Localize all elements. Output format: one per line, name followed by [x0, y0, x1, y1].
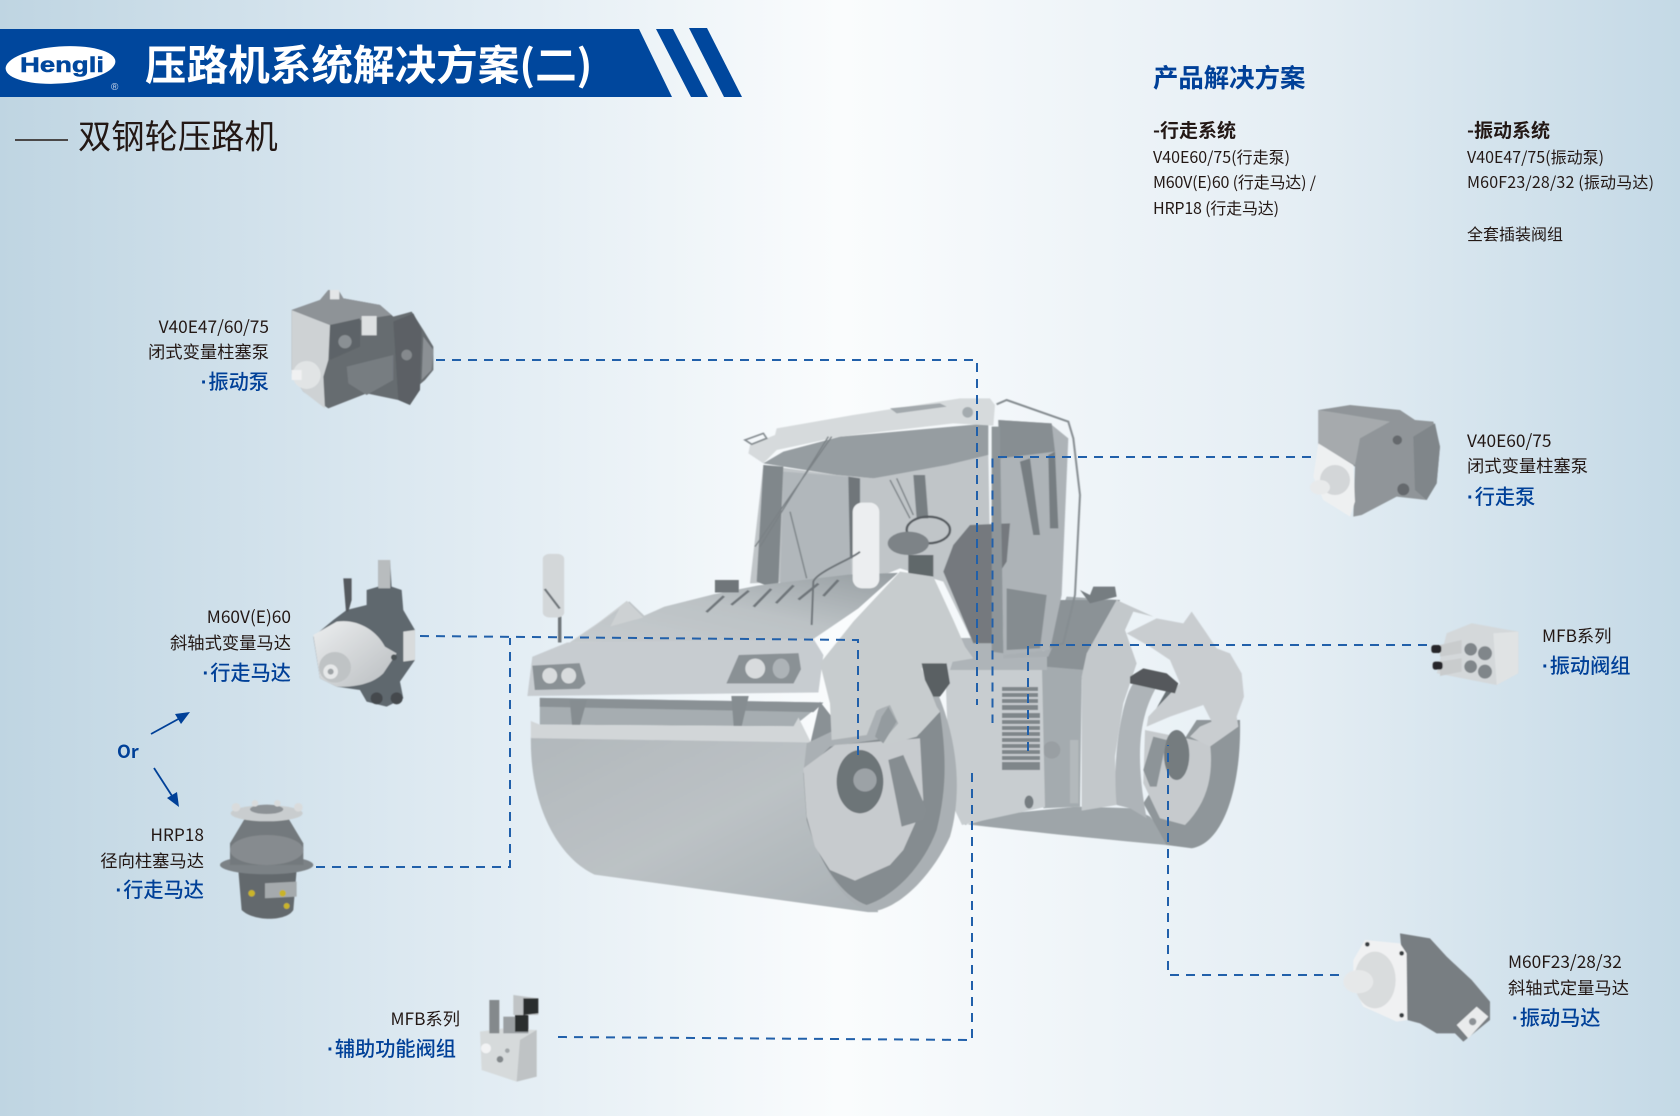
label: V40E60/75 travel pump: 闭式变量柱塞泵 [1467, 452, 1588, 477]
front drum shell [531, 737, 878, 912]
icon: M60F vibration motor [1343, 933, 1490, 1042]
label: HRP18 radial piston motor: ·行走马达 [116, 874, 204, 903]
vibration system list: -振动系统 [1467, 116, 1550, 143]
icon: HRP18 radial piston motor [220, 800, 313, 919]
rear body shadow [1040, 597, 1120, 808]
cab roof underside [763, 423, 988, 478]
label: V40E47 vibration pump: ·振动泵 [201, 366, 269, 395]
label: M60F vibration motor: 斜轴式定量马达 [1508, 974, 1629, 999]
vent grille [1002, 687, 1040, 770]
cab roof [748, 398, 995, 463]
label: HRP18 radial piston motor: HRP18 [150, 821, 204, 846]
icon: MFB auxiliary valve block [480, 995, 538, 1082]
drum wedge [803, 702, 832, 773]
label: M60V(E)60 travel motor: ·行走马达 [202, 657, 291, 686]
or choice [117, 712, 190, 807]
rear undercarriage [965, 807, 1167, 845]
banner stripe two [689, 28, 742, 97]
hydraulic hose [922, 663, 950, 697]
label: HRP18 radial piston motor: 径向柱塞马达 [100, 847, 204, 872]
label: MFB auxiliary valve: MFB系列 [390, 1005, 460, 1030]
leader: travel pump [992, 457, 1311, 723]
vibration system list: V40E47/75(振动泵) [1467, 144, 1604, 168]
left mirror [556, 616, 563, 642]
rear drum disc [1143, 730, 1211, 825]
drum disc [803, 738, 923, 881]
logo: ® [111, 82, 119, 93]
label: MFB vibration valve [1542, 622, 1630, 679]
icon: V40E47 vibration pump [292, 290, 433, 408]
vibration system list: 全套插装阀组 [1467, 221, 1563, 245]
arrow down [154, 768, 179, 807]
driver seat [943, 523, 1010, 643]
door pillar [992, 427, 1003, 653]
rear fender [1082, 600, 1153, 811]
label: V40E60/75 travel pump: ·行走泵 [1467, 481, 1535, 510]
label: V40E47 vibration pump: V40E47/60/75 [159, 313, 269, 338]
label: MFB vibration valve: MFB系列 [1542, 622, 1612, 647]
travel system list: -行走系统 [1153, 116, 1236, 143]
road roller illustration [527, 398, 1244, 912]
banner bar [0, 29, 672, 97]
panel: product solutions [1153, 59, 1654, 245]
heading: 产品解决方案 [1153, 59, 1305, 95]
travel system list: HRP18 (行走马达) [1153, 195, 1279, 219]
drum hub [837, 750, 883, 813]
or label: Or [117, 738, 139, 764]
front hood band [527, 639, 823, 696]
leader: HRP18 travel motor [316, 638, 510, 867]
wipers [755, 437, 913, 578]
label: M60F vibration motor: ·振动马达 [1512, 1002, 1600, 1031]
label: MFB vibration valve: ·振动阀组 [1542, 650, 1630, 679]
leader: auxiliary valve [558, 773, 972, 1040]
vibration system list: M60F23/28/32 (振动马达) [1467, 169, 1654, 193]
steering wheel [907, 517, 950, 543]
icon: M60V(E)60 travel motor [313, 560, 415, 707]
label: V40E47 vibration pump [148, 313, 269, 395]
cab [745, 398, 1080, 658]
engine hood [570, 573, 898, 642]
icon: MFB vibration valve block [1431, 623, 1518, 685]
label: M60V(E)60 travel motor [170, 603, 291, 686]
title: 压路机系统解决方案(二) [145, 32, 592, 92]
label: V40E47 vibration pump: 闭式变量柱塞泵 [148, 338, 269, 363]
label: V40E60/75 travel pump: V40E60/75 [1467, 427, 1551, 452]
travel system list: V40E60/75(行走泵) [1153, 144, 1290, 168]
leader: vibration pump [436, 360, 977, 705]
label: HRP18 radial piston motor [100, 821, 204, 903]
logo [4, 43, 119, 93]
leader lines [316, 360, 1427, 1040]
leader: vibration motor [1168, 745, 1339, 975]
windshield [750, 455, 992, 643]
front drum end [803, 683, 957, 912]
label: V40E60/75 travel pump [1467, 427, 1588, 510]
icon: V40E60/75 travel pump [1310, 405, 1440, 517]
travel system list: M60V(E)60 (行走马达) / [1153, 169, 1317, 193]
front bumper [540, 698, 823, 726]
front side plate [820, 572, 973, 747]
leader: M60V travel motor [420, 636, 858, 760]
rear drum and frame [965, 587, 1244, 848]
subtitle: 双钢轮压路机 [78, 110, 278, 158]
rear side plate [1127, 612, 1244, 747]
drum rim [803, 683, 957, 912]
door outline [997, 400, 1080, 647]
label: M60F vibration motor [1508, 948, 1629, 1031]
label: M60V(E)60 travel motor: M60V(E)60 [207, 603, 291, 628]
rear drum rim [1143, 720, 1240, 848]
arrow up [151, 712, 190, 734]
label: M60F vibration motor: M60F23/28/32 [1508, 948, 1622, 973]
label: M60V(E)60 travel motor: 斜轴式变量马达 [170, 629, 291, 654]
drum bracket [888, 755, 927, 827]
header banner [0, 28, 742, 97]
leader: vibration valve [1028, 645, 1427, 751]
label: MFB auxiliary valve: ·辅助功能阀组 [327, 1033, 456, 1062]
vibration system list [1467, 116, 1654, 245]
cab pillars [757, 465, 783, 585]
label: MFB auxiliary valve [327, 1005, 460, 1062]
door glass [998, 420, 1068, 655]
right mirror [812, 503, 879, 625]
logo: Hengli [20, 54, 104, 77]
rear hose [1115, 683, 1157, 818]
center chassis [945, 638, 1047, 825]
travel system list [1153, 116, 1317, 219]
banner stripe one [656, 29, 708, 97]
rear hub [1164, 730, 1189, 780]
rear hydraulic hoses [1130, 668, 1178, 693]
headlights [532, 653, 801, 690]
